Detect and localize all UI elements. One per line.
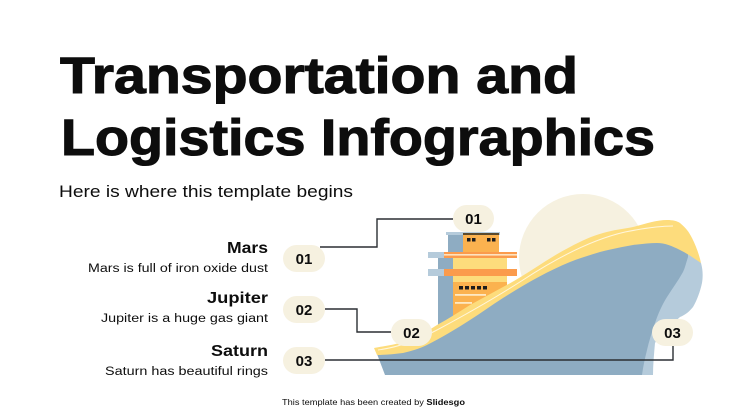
title: Logistics Infographics — [61, 109, 655, 166]
connector line 01 — [320, 219, 453, 247]
ship hull — [377, 235, 688, 375]
pill: ship 02 — [391, 319, 432, 346]
item: Mars: Mars is full of iron oxide dust — [88, 263, 269, 275]
item: Jupiter: Jupiter is a huge gas giant — [101, 313, 269, 325]
ship illustration — [374, 194, 703, 375]
pill: left 01: 01 — [296, 251, 312, 268]
pill: left 03: 03 — [296, 353, 312, 370]
title: Transportation and — [60, 47, 578, 104]
item: Saturn: Saturn has beautiful rings — [105, 366, 268, 378]
item: Mars: Mars — [227, 240, 268, 257]
pill: ship 01: 01 — [465, 211, 482, 228]
pill: ship 03: 03 — [664, 325, 681, 342]
pill: left 02: 02 — [296, 302, 312, 319]
item: Saturn: Saturn — [211, 343, 268, 360]
subtitle: Here is where this template begins — [59, 183, 353, 201]
pill: ship 02: 02 — [403, 325, 420, 342]
pill: left 02 — [283, 296, 325, 323]
title — [60, 47, 655, 166]
connector line 02 — [325, 309, 391, 332]
bulbous bow — [640, 245, 703, 375]
pill: left 03 — [283, 347, 325, 374]
pill: ship 01 — [453, 205, 494, 232]
item: Jupiter: Jupiter — [207, 290, 268, 307]
pill: ship 03 — [652, 319, 693, 346]
item: Jupiter — [101, 290, 269, 325]
item: Saturn — [105, 343, 268, 378]
sun circle — [519, 194, 647, 322]
pill: left 01 — [283, 245, 325, 272]
connector line 03 — [325, 346, 673, 360]
yellow deck band — [374, 220, 701, 355]
item: Mars — [88, 240, 269, 275]
ship superstructure — [428, 232, 517, 328]
band highlight — [378, 226, 673, 350]
footer credit: This template has been created by Slidesgo — [282, 397, 465, 407]
